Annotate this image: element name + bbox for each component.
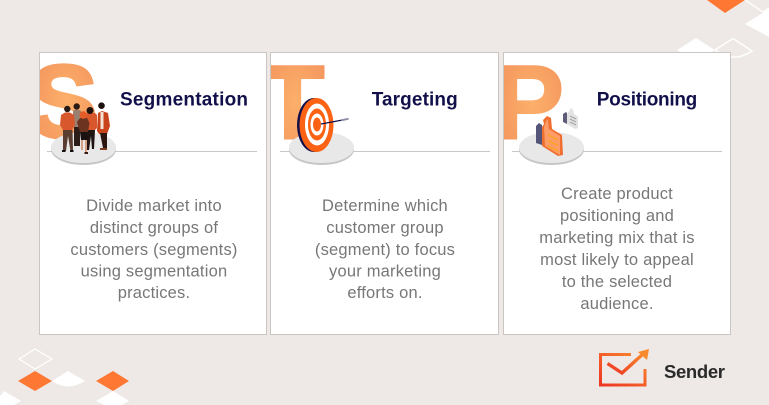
decorative diamonds: top right [677, 0, 769, 62]
wordmark: Sender [664, 361, 725, 382]
heading: Positioning [597, 90, 697, 110]
body text: distinct groups of [90, 219, 218, 237]
person centre right [85, 113, 97, 130]
body text: Create product [561, 185, 673, 203]
body text: customers (segments) [70, 241, 238, 259]
icon: envelope with arrow [600, 349, 649, 385]
person left [60, 112, 75, 130]
body text: most likely to appeal [540, 251, 694, 269]
heading: Segmentation [120, 90, 248, 110]
body text: practices. [118, 284, 190, 302]
decorative diamonds: bottom left [0, 349, 129, 405]
icon: target with arrow [289, 98, 354, 165]
big letter T: T [260, 44, 325, 161]
body text: using segmentation [81, 262, 227, 280]
panel: segmentation [29, 44, 266, 334]
logo: Sender [600, 349, 725, 385]
body text: customer group [326, 219, 444, 237]
body text: Divide market into [86, 197, 222, 215]
big letter S: S [29, 44, 98, 159]
panel: positioning [494, 44, 730, 334]
body text: efforts on. [347, 284, 423, 302]
body text: your marketing [329, 262, 441, 280]
body text: (segment) to focus [315, 241, 455, 259]
person right [97, 111, 110, 134]
body text: marketing mix that is [539, 229, 695, 247]
heading: Targeting [372, 90, 458, 110]
body text: audience. [580, 295, 654, 313]
body text: Determine which [322, 197, 448, 215]
icon: thumbs up [519, 108, 584, 165]
panel: targeting [260, 44, 498, 334]
person back [73, 110, 81, 127]
divider line [512, 150, 722, 152]
big letter P: P [494, 44, 564, 161]
body text: to the selected [562, 273, 672, 291]
divider line [280, 150, 490, 152]
body text: positioning and [560, 207, 674, 225]
divider line [47, 150, 257, 152]
person centre woman [77, 118, 90, 132]
icon: group of people on a platform [51, 102, 116, 165]
